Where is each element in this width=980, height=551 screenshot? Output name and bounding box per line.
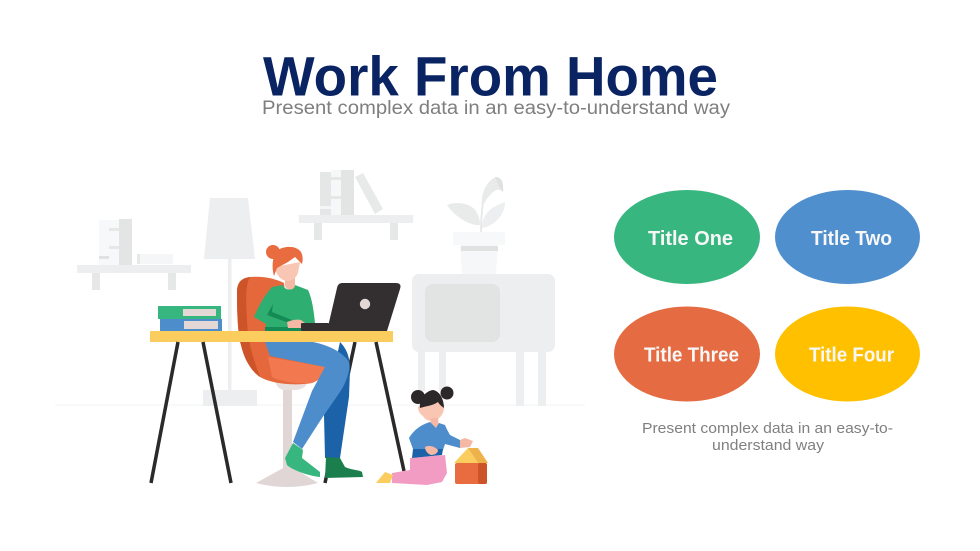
head with pigtails bbox=[411, 386, 454, 428]
oval: title one bbox=[614, 190, 760, 284]
oval: title three bbox=[614, 306, 760, 402]
woman torso bbox=[254, 285, 315, 331]
cabinet bbox=[412, 274, 555, 406]
oval: title three: Title Three bbox=[644, 344, 739, 366]
oval: title four: Title Four bbox=[809, 344, 894, 366]
oval: title one: Title One bbox=[648, 227, 733, 250]
desk legs bbox=[151, 342, 404, 483]
woman head bbox=[266, 245, 303, 290]
toy house bbox=[454, 448, 488, 484]
floor lamp bbox=[203, 198, 257, 406]
stacked books bbox=[158, 306, 222, 331]
caption: understand way bbox=[712, 438, 825, 454]
pink trousers bbox=[392, 455, 447, 485]
caption bbox=[642, 421, 893, 454]
legs bbox=[265, 342, 363, 478]
title: Work From Home bbox=[263, 44, 718, 108]
desk top bbox=[150, 331, 393, 342]
caption: Present complex data in an easy-to- bbox=[642, 421, 893, 437]
laptop bbox=[301, 283, 400, 331]
back desk leg bbox=[325, 342, 355, 483]
illustration: child with toy house bbox=[376, 386, 488, 485]
body bbox=[409, 422, 473, 458]
illustration: desk and woman bbox=[150, 245, 404, 487]
oval: title four bbox=[775, 306, 920, 402]
right shelf with books bbox=[299, 170, 413, 240]
subtitle: Present complex data in an easy-to-understand way bbox=[262, 98, 731, 119]
oval: title two: Title Two bbox=[811, 227, 892, 250]
potted plant bbox=[447, 177, 505, 274]
illustration: room background bbox=[55, 170, 585, 406]
shoe bbox=[376, 472, 393, 483]
chair bbox=[237, 277, 326, 487]
left shelf with books bbox=[77, 219, 191, 290]
oval: title two bbox=[775, 190, 920, 284]
